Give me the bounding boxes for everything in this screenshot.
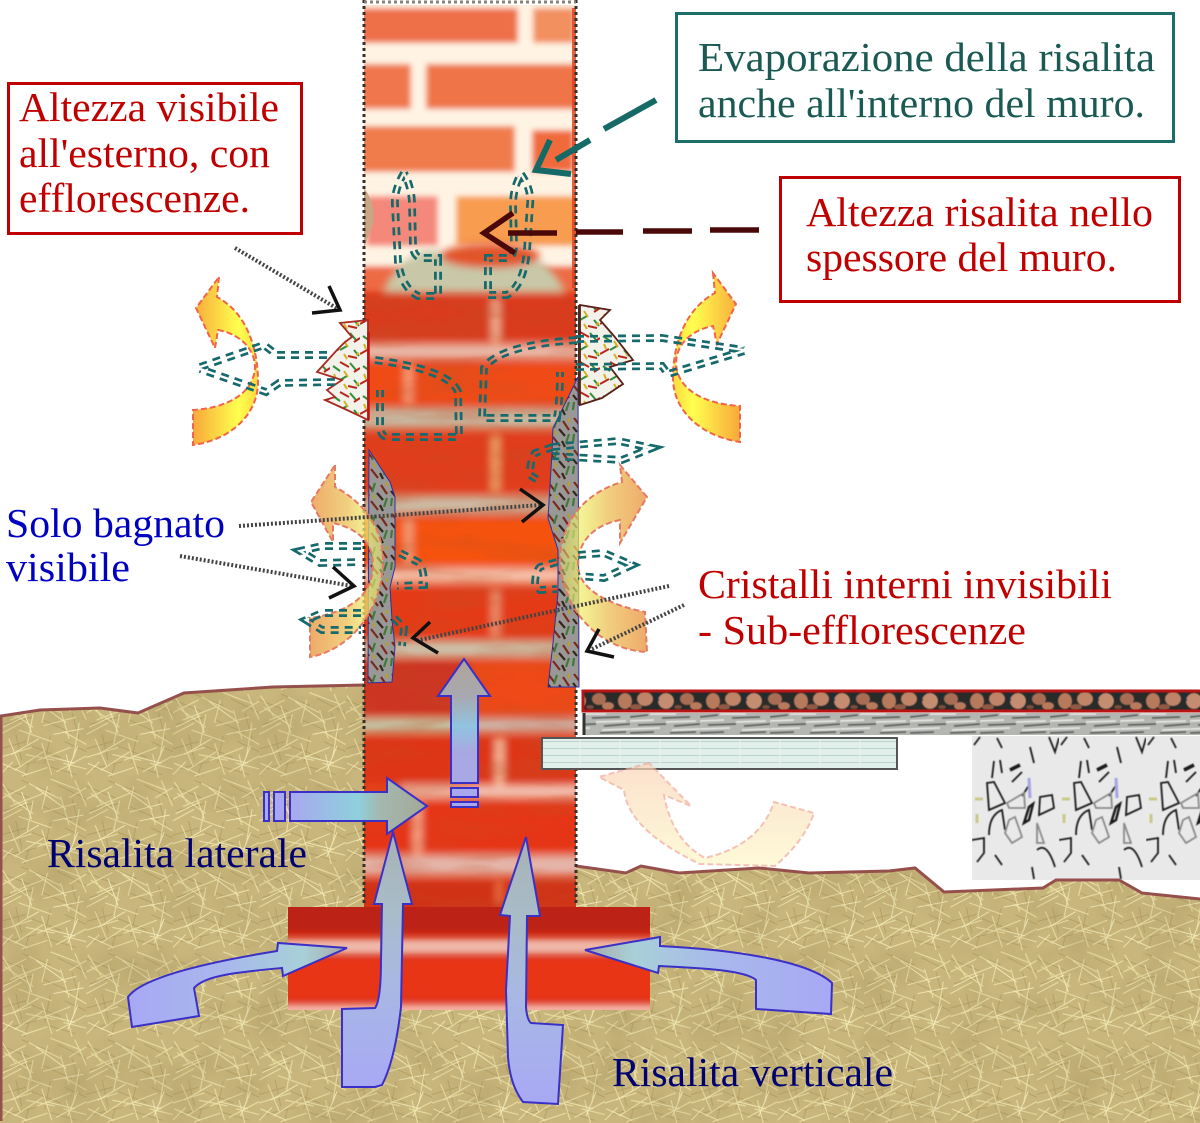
- icon: evaporation arrow upper left: [193, 277, 258, 445]
- label: lateral rise: Risalita laterale: [47, 830, 307, 876]
- wall dotted edges: [364, 0, 576, 905]
- callout: visible height outside: all'esterno, con: [19, 130, 270, 176]
- label: internal crystals: - Sub-efflorescenze: [698, 607, 1026, 653]
- panel: wet patch on left of wall: [368, 450, 395, 683]
- callout: height in wall thickness: [780, 178, 1180, 302]
- callout: height in wall thickness: spessore del muro.: [806, 234, 1117, 280]
- leader arrow: visible height: [235, 248, 340, 313]
- arrow: rise inside wall: [438, 659, 490, 807]
- footing bricks: [288, 907, 650, 1010]
- icon: efflorescence right: [579, 305, 633, 405]
- panel: wet patch on right of wall: [548, 377, 579, 687]
- callout: evaporation: anche all'interno del muro.: [698, 80, 1145, 126]
- floor: grey screed layer: [584, 713, 1200, 735]
- icon: efflorescence left: [317, 320, 368, 420]
- icon: evaporation arrow lower left: [310, 465, 383, 657]
- leader arrow: inner crystals left: [413, 586, 669, 653]
- floor: granite tile layer: [583, 691, 1200, 711]
- arrow: dark dashed to wall thickness height: [484, 213, 759, 253]
- arrow: lateral rise from right under footing: [585, 937, 832, 1014]
- label: only wet visible: visibile: [6, 544, 130, 590]
- floor: pale concrete slab: [542, 738, 897, 769]
- dashed capillary flow lines: [200, 173, 744, 646]
- callout: visible height outside: efflorescenze.: [19, 175, 250, 221]
- leader arrow: inner crystals right: [587, 605, 684, 657]
- label: only wet visible: Solo bagnato: [6, 500, 225, 546]
- arrow: lateral rise from left under footing: [128, 943, 347, 1027]
- label: internal crystals: [698, 561, 1112, 653]
- label: internal crystals: Cristalli interni invisibili: [698, 561, 1112, 607]
- icon: pale evaporation arrow under the slab: [599, 763, 814, 866]
- callout: visible height outside: Altezza visibile: [19, 84, 279, 130]
- label: vertical rise: Risalita verticale: [612, 1049, 893, 1095]
- arrow: vertical rise right: [500, 837, 563, 1104]
- callout: visible height outside: [8, 84, 302, 234]
- callout: height in wall thickness: Altezza risalita nello: [806, 189, 1153, 235]
- icon: evaporation arrow lower right: [560, 465, 647, 652]
- arrow: vertical rise left: [342, 832, 412, 1087]
- leader arrow: solo bagnato to left patch: [180, 556, 354, 598]
- leader arrow: solo bagnato to right patch: [239, 489, 543, 526]
- callout: evaporation: [676, 14, 1174, 142]
- arrow: lateral rise entering wall: [264, 778, 427, 834]
- ground: [0, 685, 1200, 1123]
- callout: evaporation: Evaporazione della risalita: [698, 34, 1155, 80]
- label: only wet visible: [6, 500, 225, 590]
- arrow: teal dashed to evaporation point: [536, 100, 656, 174]
- icon: evaporation arrow upper right: [673, 273, 740, 442]
- brick wall: [355, 0, 585, 912]
- gravel fill under the floor: [972, 736, 1200, 880]
